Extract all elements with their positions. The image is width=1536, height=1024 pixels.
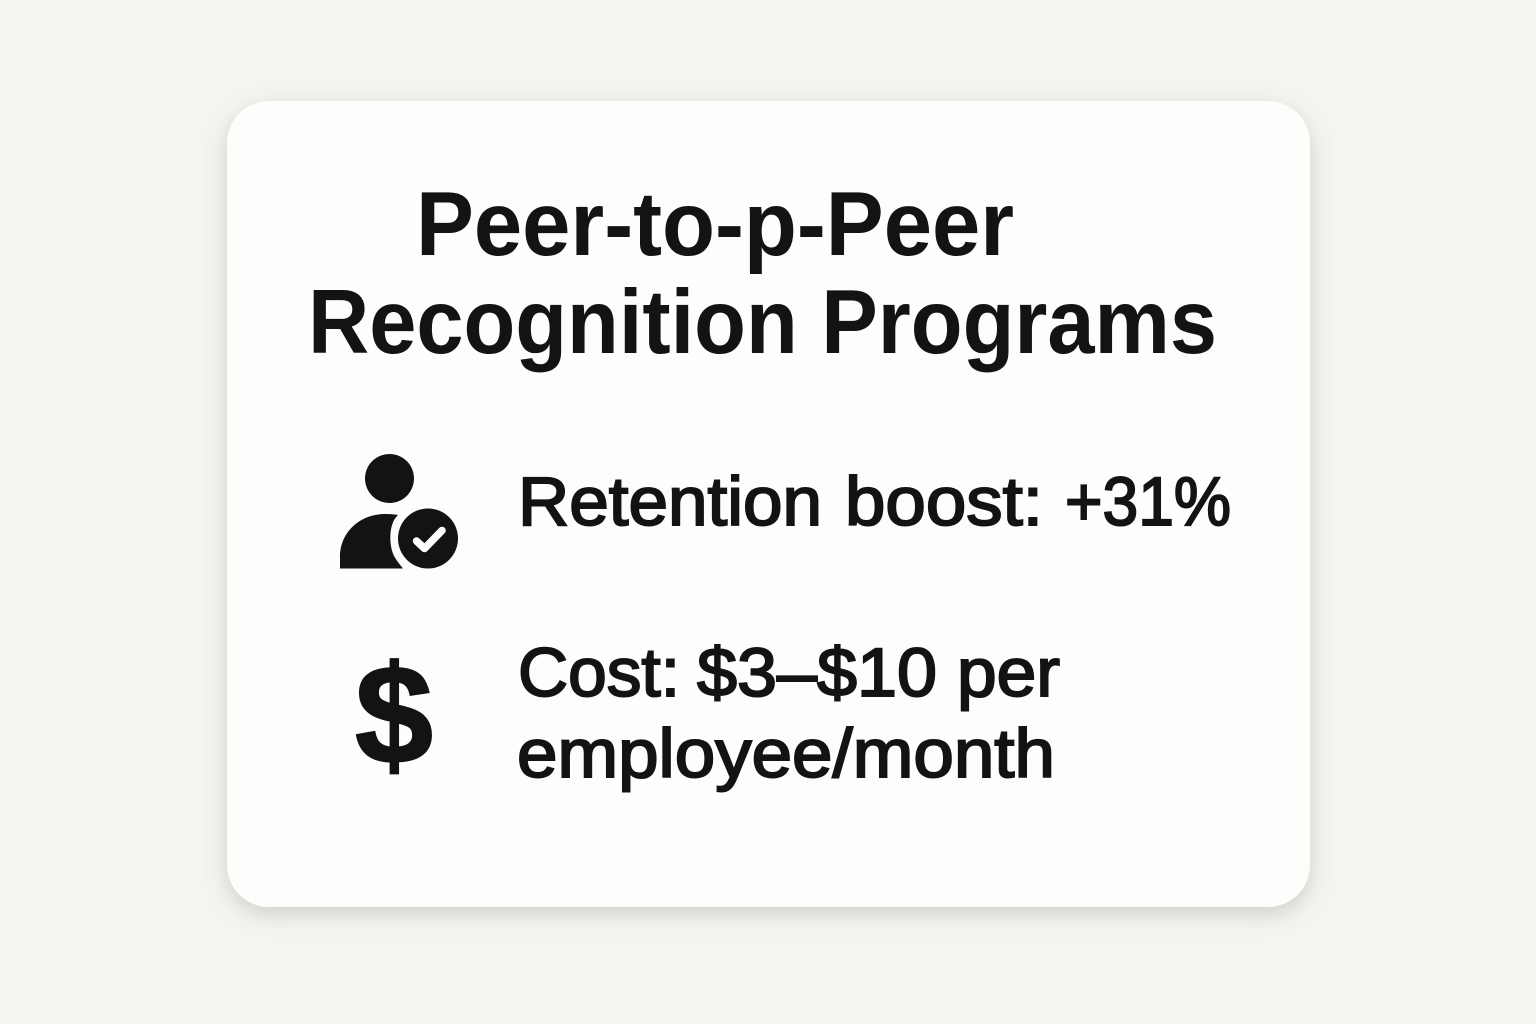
retention stat: boost:	[845, 463, 1043, 540]
title	[308, 174, 1217, 373]
icon: person with check badge	[340, 454, 458, 568]
retention stat: +31%	[1065, 463, 1231, 540]
cost stat: $3–$10	[697, 634, 937, 711]
cost stat: per	[957, 634, 1060, 711]
title line 2: Recognition Programs	[308, 272, 1217, 373]
panel: card	[227, 101, 1310, 907]
retention stat	[518, 463, 1231, 540]
icon: dollar sign: $	[355, 636, 433, 793]
cost stat	[517, 634, 1060, 792]
cost stat: Cost:	[518, 634, 680, 711]
title line 1: Peer-to-p-Peer	[416, 174, 1014, 275]
cost stat: employee/month	[517, 715, 1055, 792]
retention stat: Retention	[518, 463, 822, 540]
